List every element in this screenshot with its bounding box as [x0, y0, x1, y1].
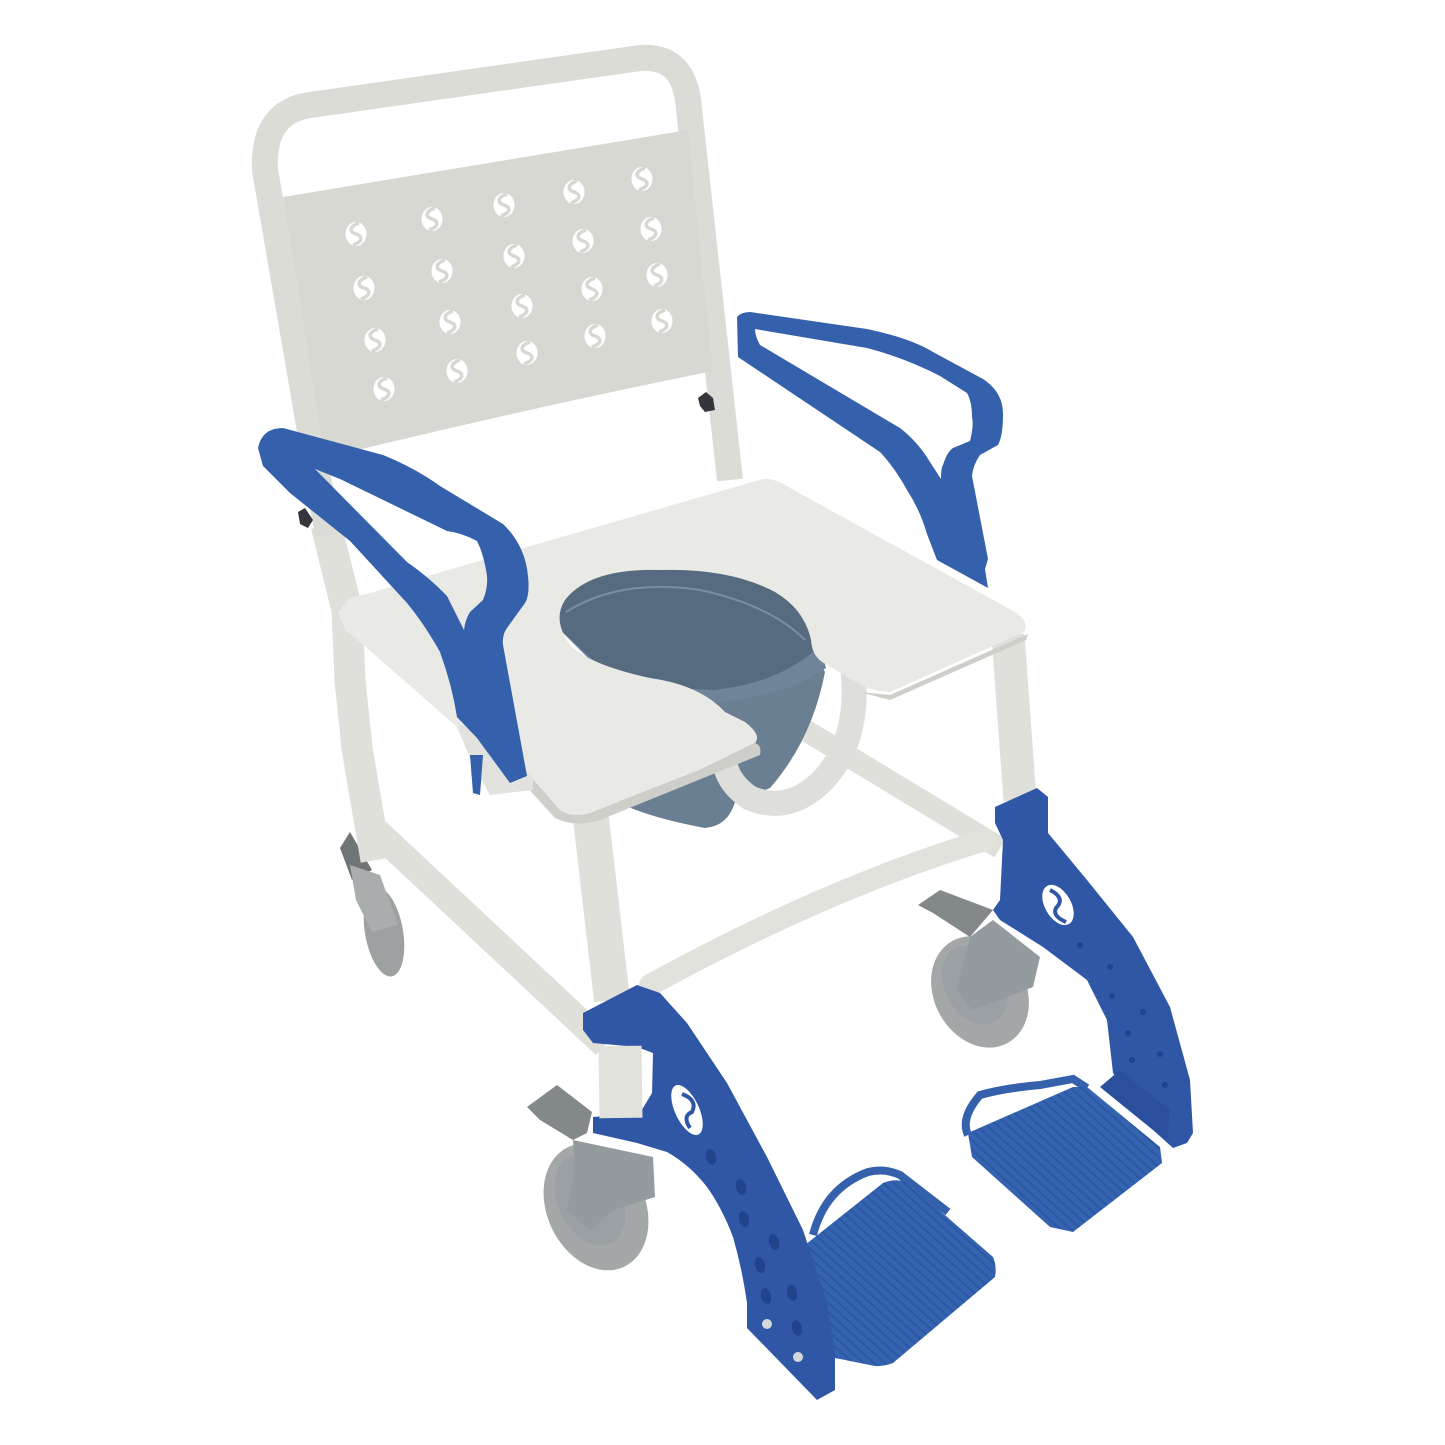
rear right wheel	[340, 832, 411, 980]
foot hinge	[1100, 1070, 1170, 1140]
foot strap	[966, 1079, 1087, 1135]
commode bucket	[550, 560, 826, 828]
backrest panel	[283, 130, 713, 458]
lower leg tube	[620, 1046, 621, 1118]
far armrest	[737, 312, 1003, 588]
bucket support tube	[725, 670, 854, 803]
foot strap	[813, 1171, 948, 1235]
backrest frame tube	[265, 58, 730, 535]
right foot plate	[966, 1079, 1162, 1232]
near armrest hinge bracket	[457, 722, 533, 795]
front wheel with brake	[524, 1085, 668, 1288]
near armrest	[258, 428, 529, 783]
left foot plate	[805, 1171, 996, 1366]
right leg rest	[993, 788, 1193, 1148]
seat	[338, 479, 1026, 815]
frame tubes behind seat	[326, 525, 1020, 1045]
logo cut-out	[665, 1080, 709, 1140]
backrest knobs	[298, 392, 715, 528]
adjustment holes	[704, 1148, 804, 1337]
left leg rest	[583, 985, 835, 1400]
rear left wheel with brake	[912, 890, 1048, 1065]
seat shadow edge	[525, 634, 1028, 824]
backrest ventilation holes	[346, 167, 672, 401]
tread	[805, 1180, 996, 1366]
adjustment holes	[1077, 942, 1168, 1088]
tread	[968, 1087, 1162, 1232]
logo cut-out	[1036, 879, 1080, 931]
